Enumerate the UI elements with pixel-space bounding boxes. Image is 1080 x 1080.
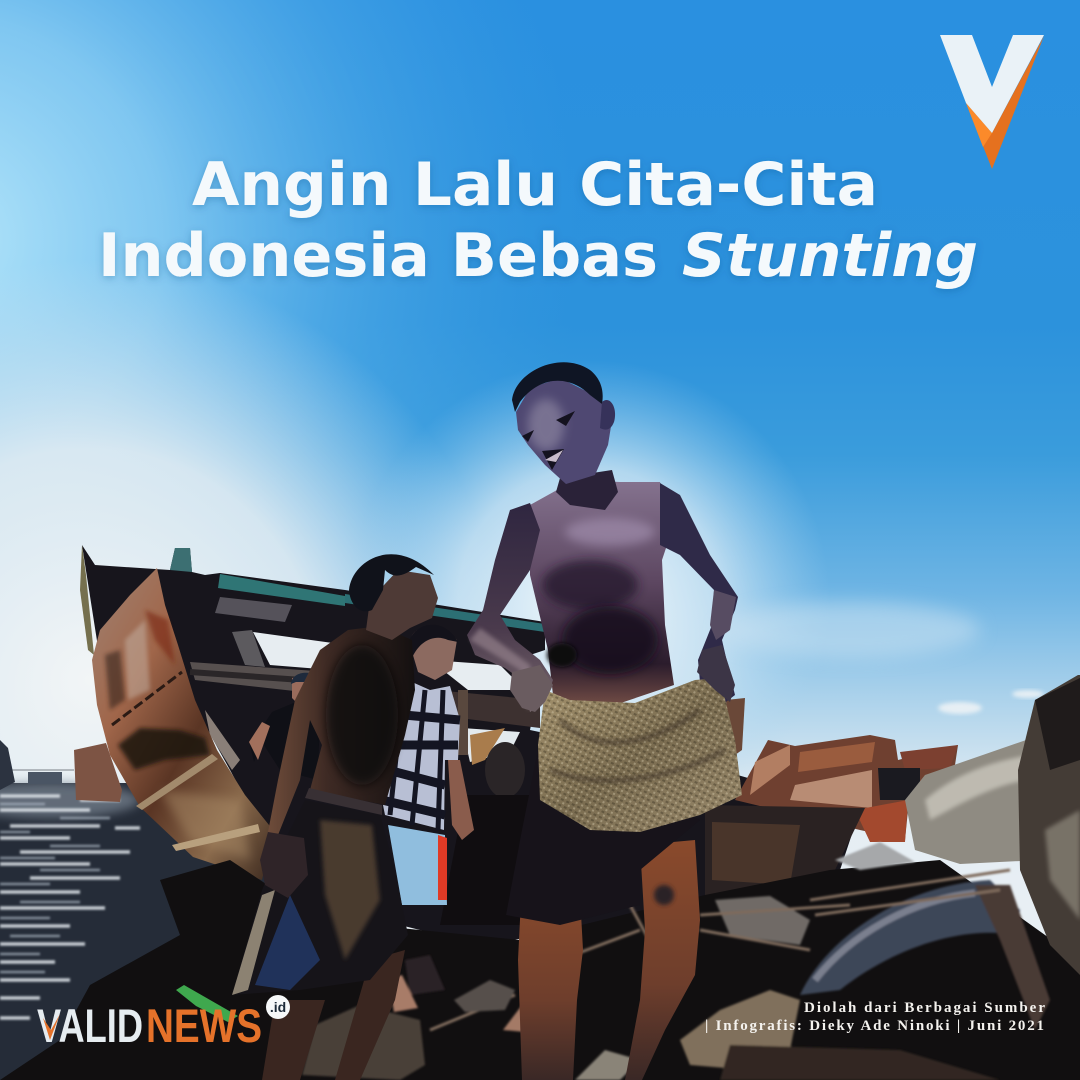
boy in profile, left xyxy=(232,554,438,1080)
arm of plaid boy xyxy=(448,760,474,840)
main boy neck xyxy=(556,470,618,510)
worker in black shirt, sitting xyxy=(249,673,320,780)
plaid shirt boy head xyxy=(408,625,458,680)
logo: V mark xyxy=(940,35,1044,169)
logo: Valid News xyxy=(37,985,290,1052)
.id badge xyxy=(266,995,290,1019)
wrecked ship: dark steel frame xyxy=(80,545,860,945)
profile boy head xyxy=(349,554,438,640)
main boy xyxy=(467,362,742,1080)
main boy torso xyxy=(530,480,674,710)
credit text xyxy=(705,1000,1045,1034)
shorts light blue xyxy=(388,825,447,905)
main boy hands xyxy=(510,645,735,712)
wordmark: VALID xyxy=(37,999,143,1052)
plaid shirt xyxy=(380,682,460,830)
title: Indonesia Bebas xyxy=(98,221,658,291)
title: Angin Lalu Cita-Cita xyxy=(192,150,878,220)
orange check in V xyxy=(43,1014,60,1040)
main boy left arm xyxy=(467,503,553,712)
.id badge: .id xyxy=(270,999,286,1015)
profile boy shorts xyxy=(232,800,408,995)
credit text: | Infografis: Dieky Ade Ninoki | Juni 2021 xyxy=(705,1018,1044,1034)
green flag xyxy=(176,985,238,1022)
main boy head xyxy=(512,362,615,484)
profile boy hand xyxy=(260,832,308,898)
boy in plaid shirt xyxy=(380,625,474,905)
profile boy torso and arm xyxy=(268,626,415,835)
far shore structures xyxy=(0,740,122,802)
main boy dark shorts xyxy=(506,740,700,925)
dirt on chest xyxy=(542,518,658,674)
wordmark orange part: NEWS xyxy=(146,999,262,1052)
title: Stunting xyxy=(682,221,978,291)
foreground dark ground and rubble xyxy=(0,842,1080,1080)
credit text: Diolah dari Berbagai Sumber xyxy=(804,1000,1045,1016)
right side rusted barge xyxy=(705,698,958,905)
main boy right arm xyxy=(660,483,738,705)
profile boy legs xyxy=(262,950,405,1080)
water on the left xyxy=(0,770,300,1080)
title xyxy=(98,150,978,291)
wrecked ship: rusty hull plate xyxy=(92,568,273,880)
main boy sack xyxy=(538,678,742,832)
main boy legs xyxy=(518,840,700,1080)
rocks on the right xyxy=(905,675,1080,975)
